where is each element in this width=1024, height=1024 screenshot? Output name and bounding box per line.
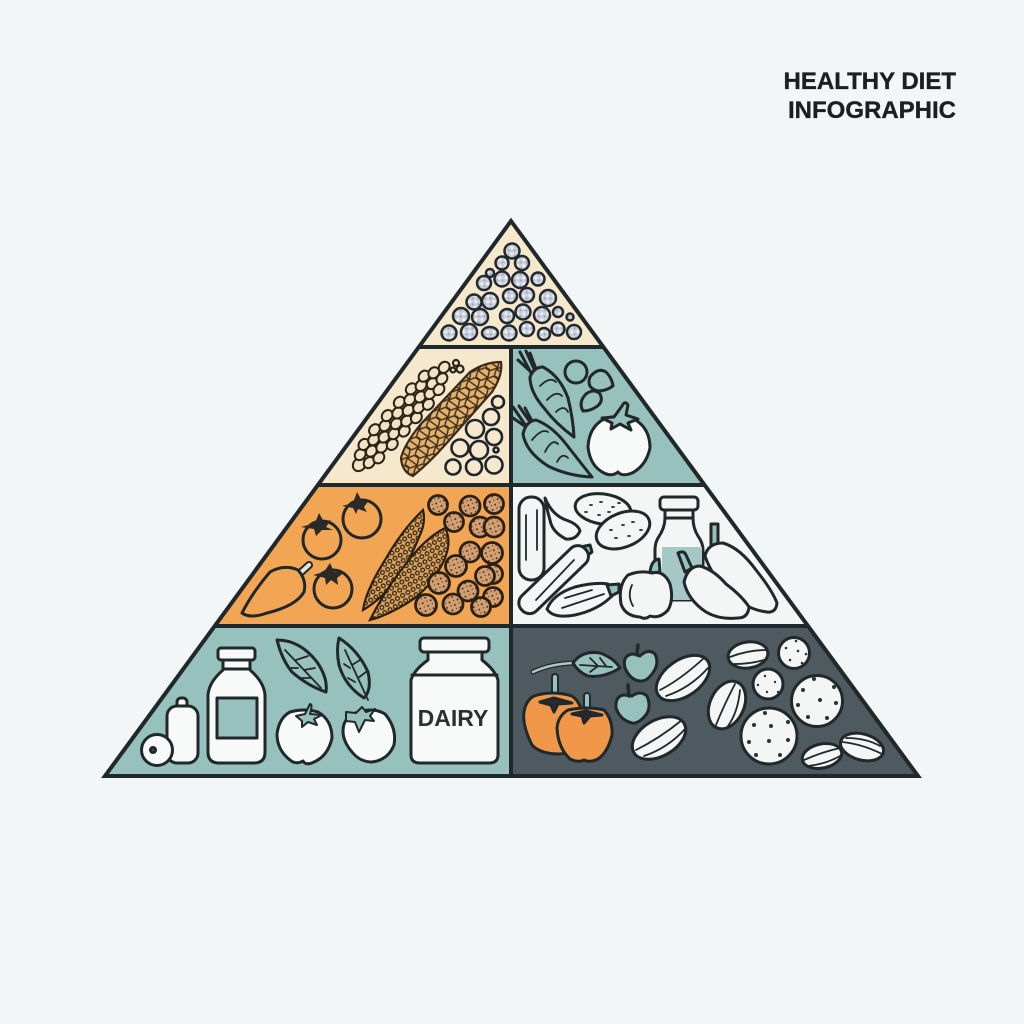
bottom left: dairy jar <box>411 638 498 763</box>
second tier left: golden grain stalk <box>401 362 501 476</box>
panel: third tier left background <box>214 485 511 626</box>
second tier right: carrot two <box>513 406 592 477</box>
bottom left: tomato one <box>277 704 332 764</box>
pyramid outline and dividers <box>105 221 918 776</box>
bottom left: leaf two <box>338 638 369 700</box>
second tier right: three berries <box>565 361 613 411</box>
third tier right: upright cucumber <box>519 497 544 580</box>
bottom right: teal apple one <box>624 645 657 681</box>
bottom left: small bottle <box>167 698 198 763</box>
third tier left: tomato leaves <box>301 492 369 585</box>
bottom right: speckles <box>747 640 838 757</box>
bottom left: leaf one <box>277 640 326 692</box>
third tier right: bell pepper <box>620 559 672 618</box>
second tier right: carrot one <box>518 351 574 437</box>
food pyramid <box>104 220 920 777</box>
top tier: berries <box>442 244 581 340</box>
second tier left: seed rings <box>446 396 504 475</box>
dairy label: DAIRY <box>418 705 488 731</box>
bottom right: orange pepper front <box>557 696 612 761</box>
third tier right: bottle <box>655 497 703 600</box>
panel: third tier right background <box>511 485 808 626</box>
bottom left: tomato two <box>343 707 395 762</box>
bottom right: teal apple two <box>616 685 649 723</box>
bottom right: speckled balls <box>741 638 842 764</box>
title: INFOGRAPHIC <box>788 97 956 124</box>
bottom left: small round fruit <box>142 734 172 766</box>
title <box>784 68 956 124</box>
third tier left: seed pods <box>363 510 448 620</box>
panel: bottom tier right background <box>511 626 920 777</box>
second tier left: pale grain stalk <box>342 353 462 480</box>
bottom right: leaf with stem <box>533 652 620 676</box>
panel: top tier background <box>418 220 604 347</box>
panel: second tier right background <box>511 347 705 485</box>
third tier left: tomatoes <box>303 500 381 608</box>
third tier left: pepper <box>242 565 309 616</box>
third tier right: zucchini two <box>547 583 619 616</box>
third tier right: small squash <box>545 498 580 539</box>
bottom left: large bottle <box>208 648 265 763</box>
third tier right: long pepper front <box>678 552 749 618</box>
icon: small seed <box>450 360 464 372</box>
bottom right: orange pepper back <box>524 677 584 754</box>
third tier left: sliced discs <box>416 494 504 616</box>
bottom right: large seeds <box>625 639 887 772</box>
third tier right: long pepper back <box>705 524 777 612</box>
second tier right: tomato <box>588 403 650 475</box>
third tier right: zucchini one <box>515 542 593 618</box>
panel: bottom tier left background <box>104 626 511 777</box>
title: HEALTHY DIET <box>784 68 956 95</box>
panel: second tier left background <box>317 347 511 485</box>
third tier right: potatoes <box>573 490 655 556</box>
